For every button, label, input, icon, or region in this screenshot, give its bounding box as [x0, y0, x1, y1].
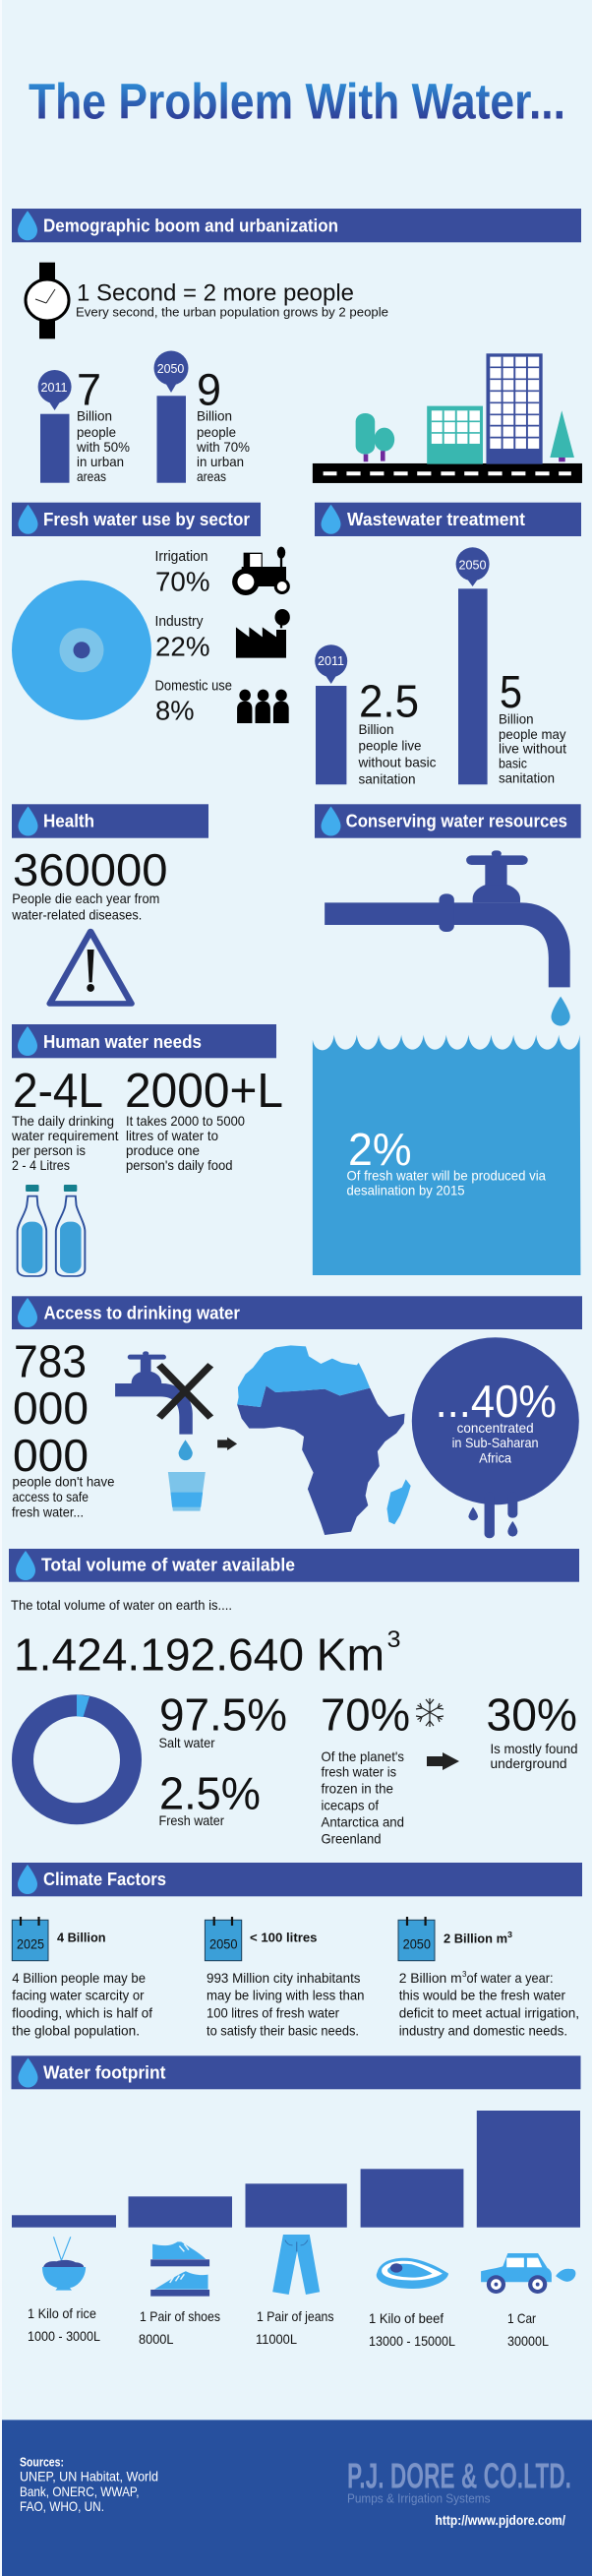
stat: 70 percent frozen: Greenland	[321, 1830, 382, 1846]
callout: 40 percent: ...40%	[436, 1376, 557, 1427]
icon: car	[481, 2253, 575, 2294]
item: 2050 2 billion m3: this would be the fresh water	[399, 1988, 565, 2003]
item: 2050 under 100 litres: to satisfy their basic needs.	[207, 2022, 359, 2038]
stat: 5 billion: 5	[500, 666, 522, 717]
stat: industry	[155, 614, 210, 662]
heading: climate factors	[12, 1863, 582, 1896]
panel: climate factors	[12, 1863, 582, 2038]
stat: 5 billion: Billion	[499, 711, 533, 727]
stat: 7 billion: areas	[77, 468, 106, 484]
stat: irrigation	[155, 549, 210, 597]
panel: water footprint	[12, 2055, 580, 2349]
icon: city street	[313, 353, 582, 483]
item: 2050 2 billion m3: industry and domestic needs.	[399, 2022, 567, 2038]
stat: 7 billion	[76, 365, 130, 484]
text: one second: 1 Second = 2 more people	[77, 280, 354, 307]
stat: 2 percent	[346, 1124, 546, 1197]
stat: 70 percent frozen: 70%	[321, 1688, 410, 1740]
heading: health: Health	[43, 812, 94, 831]
heading: access	[12, 1296, 582, 1329]
stat: 783 000 000	[12, 1335, 115, 1520]
label: beef: 13000 - 15000L	[369, 2333, 455, 2349]
panel: fresh water use by sector	[12, 503, 290, 725]
stat: domestic use: 8%	[155, 695, 195, 725]
item: 2050 2 billion m3: of water a year:	[466, 1970, 553, 1986]
label: beef	[369, 2310, 455, 2349]
icon: factory	[236, 609, 290, 658]
icon: warning triangle	[50, 932, 132, 1004]
panel: access to drinking water	[12, 1296, 582, 1538]
stat: 2000+L: person's daily food	[126, 1157, 232, 1173]
stat: 30 percent: underground	[490, 1755, 566, 1771]
icon: crossed tap and glass	[115, 1351, 210, 1511]
item: 2025 4 billion: 4 Billion	[57, 1931, 106, 1945]
arrow	[427, 1752, 459, 1770]
icon: two bottles	[18, 1185, 85, 1276]
heading: total volume	[9, 1549, 579, 1582]
icon: calendar 2025	[12, 1917, 48, 1961]
stat: 5 billion: live without	[499, 741, 566, 757]
icon: calendar 2025: 2025	[17, 1936, 44, 1952]
text: one second: Every second, the urban population grows by 2 people	[76, 305, 388, 320]
stat: 360000 deaths: People die each year from	[12, 890, 159, 906]
heading: demographic boom	[12, 209, 581, 242]
stat: salt water: Salt water	[159, 1735, 215, 1750]
stat: 2.5 billion	[358, 675, 437, 787]
stat: 2000+L: It takes 2000 to 5000	[126, 1113, 245, 1129]
label: rice	[28, 2305, 100, 2344]
heading: human water needs: Human water needs	[43, 1032, 202, 1052]
item: 2025 4 billion: 4 Billion people may be	[12, 1970, 146, 1986]
stat: 5 billion: basic	[499, 756, 527, 771]
item: 2050 under 100 litres: 993 Million city inhabitants	[207, 1970, 360, 1986]
stat: 9 billion: in urban	[197, 454, 244, 469]
stat: industry: 22%	[155, 632, 210, 662]
stat: irrigation: 70%	[155, 567, 210, 597]
callout: 40 percent: concentrated	[457, 1420, 534, 1436]
stat: 70 percent frozen: icecaps of	[321, 1797, 379, 1812]
heading: demographic boom: Demographic boom and urbanization	[43, 216, 338, 236]
heading: conserving water	[315, 804, 581, 838]
stat: 783 000 000: 000	[13, 1382, 89, 1434]
icon: calendar 2050: 2050	[209, 1936, 238, 1952]
icon: rice bowl	[42, 2237, 86, 2291]
stat: 2000+L: produce one	[126, 1142, 200, 1158]
stat: 5 billion	[499, 666, 566, 786]
text: sources: Bank, ONERC, WWAP,	[20, 2484, 140, 2499]
stat: 9 billion: people	[197, 424, 236, 440]
stat: 30 percent: 30%	[486, 1688, 577, 1740]
label: rice: 1 Kilo of rice	[28, 2305, 96, 2321]
item: 2050 2 billion m3: 2 Billion m	[399, 1970, 462, 1986]
stat: 2-4L: per person is	[12, 1142, 86, 1158]
stat: 2-4L	[11, 1065, 119, 1173]
stat: 5 billion: sanitation	[499, 770, 555, 786]
stat: 9 billion: areas	[197, 468, 226, 484]
label: shoes: 1 Pair of shoes	[140, 2308, 220, 2324]
stat: domestic use: Domestic use	[155, 678, 232, 694]
stat: total volume: 1.424.192.640 Km	[14, 1629, 385, 1681]
label: shoes	[139, 2308, 220, 2347]
stat: 783 000 000: 783	[14, 1335, 87, 1386]
item: 2050 2 billion m3: 3	[462, 1970, 467, 1979]
label: jeans	[256, 2308, 334, 2347]
stat: 360000 deaths: water-related diseases.	[11, 907, 142, 923]
item: 2025 4 billion: flooding, which is half of	[12, 2005, 152, 2021]
panel: footer	[2, 2420, 592, 2576]
stat: 2-4L: 2 - 4 Litres	[12, 1157, 70, 1173]
stat: domestic use	[155, 678, 232, 725]
heading: fresh water use: Fresh water use by sector	[43, 510, 250, 529]
stat: 70 percent frozen: fresh water is	[321, 1764, 396, 1780]
item: 2050 2 billion m3	[398, 1917, 579, 2038]
stat: 2-4L: water requirement	[11, 1128, 119, 1143]
item: 2050 2 billion m3: deficit to meet actual irrigation,	[399, 2005, 579, 2021]
stat: 2 percent: Of fresh water will be produced via	[346, 1167, 546, 1183]
label: rice: 1000 - 3000L	[28, 2328, 100, 2344]
bar: 2011 population	[38, 370, 72, 483]
stat: 2000+L	[125, 1065, 283, 1173]
icon: wrist watch	[26, 263, 69, 338]
stat: total volume: 3	[387, 1626, 401, 1653]
heading: water footprint	[12, 2055, 580, 2089]
label: jeans: 11000L	[256, 2331, 297, 2347]
panel: health	[11, 804, 208, 1004]
item: 2050 2 billion m3: 2 Billion m	[444, 1932, 507, 1946]
icon: shoes	[150, 2241, 209, 2297]
text: website: http://www.pjdore.com/	[435, 2512, 565, 2528]
text: sources	[20, 2455, 158, 2514]
bar: 2050 population	[153, 350, 189, 483]
bar: 2011 population: 2011	[41, 380, 67, 395]
stat: 70 percent frozen: Of the planet's	[321, 1748, 404, 1764]
item: 2050 under 100 litres	[205, 1917, 364, 2038]
text: sources: FAO, WHO, UN.	[20, 2498, 104, 2514]
bar: 2050 population: 2050	[157, 361, 184, 376]
stat: 5 billion: people may	[499, 726, 566, 742]
callout: 40 percent: Africa	[479, 1450, 511, 1466]
heading: conserving water: Conserving water resources	[346, 812, 567, 831]
icon: tractor	[232, 547, 290, 595]
label: car: 1 Car	[507, 2310, 536, 2326]
icon: calendar 2050: 2050	[403, 1936, 431, 1952]
stat: fresh water: Fresh water	[159, 1812, 224, 1828]
item: 2050 under 100 litres: may be living with less than	[207, 1988, 364, 2003]
stat: 70 percent frozen	[321, 1688, 410, 1846]
logo: P.J. Dore: Pumps & Irrigation Systems	[347, 2490, 491, 2505]
icon: jeans	[272, 2235, 320, 2295]
stat: 2 percent: 2%	[348, 1124, 411, 1175]
stat: 783 000 000: fresh water...	[12, 1504, 84, 1520]
icon: people	[237, 690, 289, 723]
label: jeans: 1 Pair of jeans	[257, 2308, 334, 2324]
stat: 7 billion: with 50%	[76, 439, 130, 455]
stat: 2.5 billion: Billion	[358, 721, 393, 737]
item: 2050 2 billion m3: 3	[507, 1931, 513, 1939]
stat: 9 billion	[196, 365, 250, 484]
heading: total volume: Total volume of water available	[41, 1556, 295, 1575]
stat: 2.5 billion: without basic	[358, 754, 437, 769]
stat: 30 percent	[486, 1688, 578, 1771]
stat: 9 billion: with 70%	[196, 439, 250, 455]
stat: 783 000 000: 000	[13, 1430, 89, 1481]
heading: access: Access to drinking water	[43, 1304, 240, 1323]
icon: beef steak	[377, 2258, 448, 2289]
stat: 30 percent: Is mostly found	[490, 1741, 578, 1756]
heading: water footprint: Water footprint	[43, 2063, 166, 2083]
heading: health	[12, 804, 208, 838]
bar: 2050 sanitation: 2050	[458, 557, 486, 572]
chart: footprint bars	[12, 2111, 580, 2228]
item: 2050 under 100 litres: < 100 litres	[250, 1931, 317, 1945]
stat: industry: Industry	[155, 614, 204, 630]
stat: 9 billion: Billion	[197, 408, 232, 424]
heading: wastewater: Wastewater treatment	[347, 510, 525, 529]
heading: human water needs	[12, 1024, 276, 1058]
item: 2025 4 billion: the global population.	[12, 2022, 140, 2038]
text: sources: UNEP, UN Habitat, World	[20, 2469, 158, 2484]
arrow	[217, 1438, 237, 1450]
heading: wastewater	[315, 503, 581, 536]
stat: 7 billion: in urban	[77, 454, 124, 469]
stat: 7 billion: people	[77, 424, 116, 440]
panel: demographic boom	[12, 209, 582, 484]
icon: snowflake	[416, 1698, 444, 1727]
stat: 2.5 billion: people live	[358, 738, 422, 754]
label: car: 30000L	[507, 2333, 549, 2349]
icon: large tap	[325, 850, 570, 1026]
stat: 9 billion: 9	[197, 365, 221, 415]
icon: calendar 2050	[398, 1917, 435, 1961]
panel: human water needs	[11, 1024, 283, 1276]
stat: 2-4L: 2-4L	[13, 1065, 103, 1118]
text: sources: Sources:	[20, 2455, 64, 2470]
chart: salt vs fresh donut	[23, 1694, 131, 1813]
panel: total volume of water	[9, 1549, 579, 1846]
item: 2025 4 billion: facing water scarcity or	[12, 1988, 145, 2003]
stat: 2000+L: litres of water to	[126, 1128, 218, 1143]
text: one second	[76, 280, 388, 320]
stat: fresh water: 2.5%	[159, 1767, 261, 1818]
stat: irrigation: Irrigation	[155, 549, 208, 565]
stat: salt water: 97.5%	[159, 1688, 287, 1740]
water tank	[313, 1035, 580, 1275]
stat: 2000+L: 2000+L	[125, 1065, 283, 1118]
stat: 360000 deaths: 360000	[13, 844, 167, 895]
heading: climate factors: Climate Factors	[43, 1870, 166, 1889]
stat: 70 percent frozen: Antarctica and	[321, 1814, 404, 1830]
callout: 40 percent	[412, 1337, 579, 1538]
panel: conserving water resources	[313, 804, 581, 1275]
bar: 2011 sanitation: 2011	[318, 653, 344, 668]
item: 2025 4 billion	[12, 1917, 152, 2038]
label: shoes: 8000L	[139, 2331, 174, 2347]
stat: 2-4L: The daily drinking	[12, 1113, 114, 1129]
label: beef: 1 Kilo of beef	[369, 2310, 444, 2326]
text: intro: The total volume of water on earth is....	[11, 1597, 232, 1613]
panel: wastewater treatment	[315, 503, 581, 787]
icon: calendar 2050	[205, 1917, 242, 1961]
label: car	[507, 2310, 549, 2349]
stat: 360000 deaths	[11, 844, 168, 923]
stat: 2.5 billion: sanitation	[358, 771, 415, 787]
stat: 2.5 billion: 2.5	[359, 675, 419, 726]
stat: 70 percent frozen: frozen in the	[321, 1781, 393, 1797]
stat: 7 billion: Billion	[77, 408, 112, 424]
bar: 2050 sanitation	[456, 547, 490, 784]
map: africa	[237, 1345, 411, 1535]
stat: 783 000 000: people don't have	[12, 1474, 115, 1490]
stat: 7 billion: 7	[77, 365, 101, 415]
stat: 2 percent: desalination by 2015	[346, 1182, 465, 1197]
stat: 783 000 000: access to safe	[12, 1489, 89, 1504]
callout: 40 percent: in Sub-Saharan	[452, 1435, 539, 1450]
chart: sector pie	[12, 581, 151, 720]
item: 2050 under 100 litres: 100 litres of fresh water	[207, 2005, 339, 2021]
bar: 2011 sanitation	[315, 644, 347, 784]
heading: fresh water use	[12, 503, 261, 536]
